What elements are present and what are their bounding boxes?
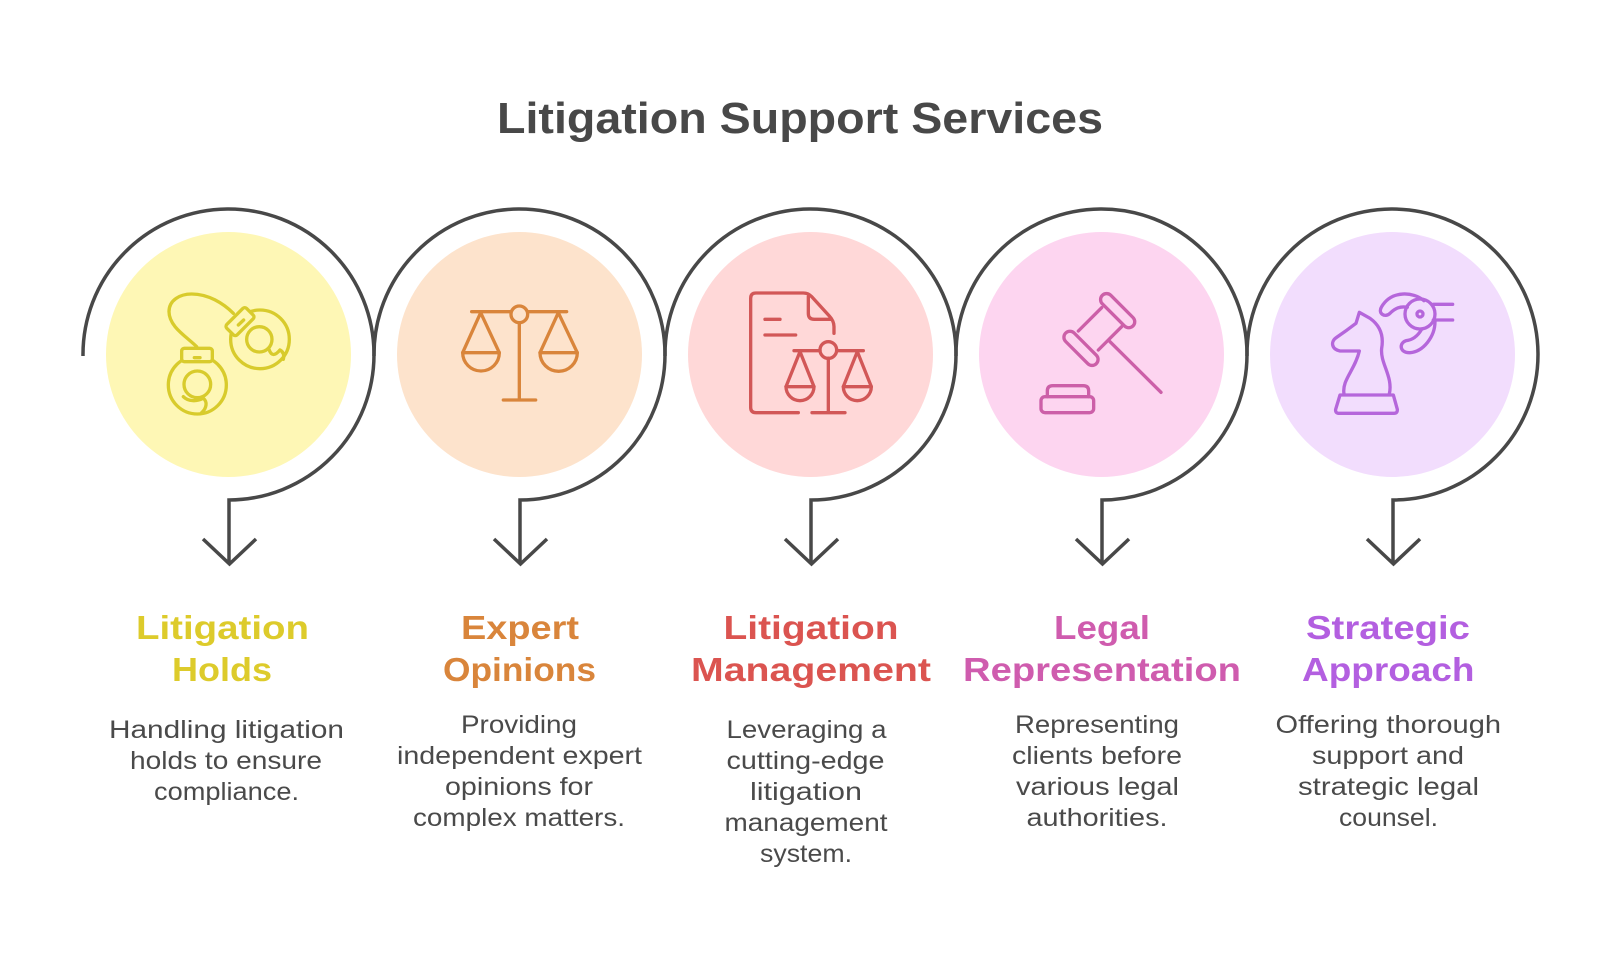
description [1276,711,1501,832]
description: independent expert [397,742,642,770]
arrow: circular arc pointing down [374,209,665,564]
icon circle: purple [1270,232,1515,477]
heading [963,609,1241,688]
description: Offering thorough [1276,711,1501,739]
icon circle: orange [397,232,642,477]
description: strategic legal [1298,773,1479,801]
description: authorities. [1026,804,1168,832]
description: litigation [750,778,862,806]
description: compliance. [154,778,299,806]
description [724,716,888,868]
description [397,711,642,832]
heading: Strategic [1306,609,1470,646]
heading: Management [691,651,931,688]
arrow: circular arc pointing down [956,209,1247,564]
icon: chess knight with target [1333,294,1453,413]
heading [691,609,931,688]
heading: Opinions [443,651,596,688]
panel: Litigation Holds [83,209,374,806]
description: Handling litigation [109,716,344,744]
icon circle: yellow [106,232,351,477]
heading: Legal [1054,609,1150,646]
heading [443,609,596,688]
icon: document with scales [751,293,871,413]
description: clients before [1012,742,1182,770]
heading: Expert [461,609,579,646]
heading: Holds [172,651,272,688]
title: Litigation Support Services [497,94,1103,143]
heading [1302,609,1474,688]
arrow: circular arc pointing down [665,209,956,564]
heading: Representation [963,651,1241,688]
icon: gavel [1041,291,1161,413]
panel: Strategic Approach [1247,209,1538,832]
description: holds to ensure [130,747,322,775]
description [109,716,344,806]
icon circle: pink [979,232,1224,477]
arrow: circular arc pointing down [83,209,374,564]
description: counsel. [1339,804,1438,832]
heading [136,609,309,688]
description: various legal [1016,773,1179,801]
icon: scales of justice [463,306,577,400]
description: management [724,809,888,837]
description: system. [760,840,852,868]
panel: Litigation Management [665,209,956,868]
description: complex matters. [413,804,625,832]
heading: Approach [1302,651,1474,688]
description: cutting-edge [726,747,884,775]
heading: Litigation [136,609,309,646]
description: Representing [1015,711,1179,739]
panel: Legal Representation [956,209,1247,832]
description: opinions for [445,773,593,801]
panel: Expert Opinions [374,209,665,832]
description: support and [1312,742,1464,770]
arrow: circular arc pointing down [1247,209,1538,564]
description: Leveraging a [726,716,887,744]
icon: handcuffs [168,294,289,414]
icon circle: red [688,232,933,477]
description [1012,711,1182,832]
heading: Litigation [724,609,898,646]
description: Providing [461,711,577,739]
